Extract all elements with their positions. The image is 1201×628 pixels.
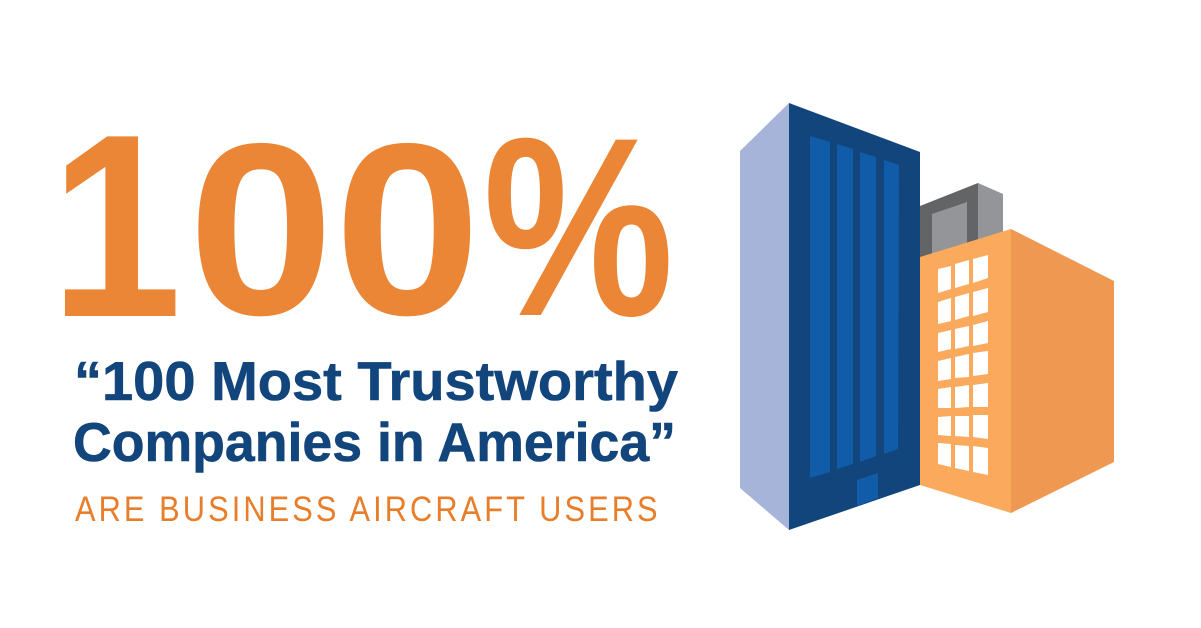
orange building	[920, 229, 1114, 513]
big statistic: 100%	[50, 81, 674, 372]
illustration: office buildings	[740, 103, 1114, 530]
heading line 1: “100 Most Trustworthy	[74, 350, 678, 412]
grey rooftop structure	[920, 183, 1003, 262]
windows	[938, 255, 988, 475]
digit 0: 0	[188, 92, 334, 366]
subheading: ARE BUSINESS AIRCRAFT USERS	[75, 489, 658, 528]
digit 0: 0	[334, 92, 481, 366]
percent sign: %	[483, 85, 674, 370]
digit 1: 1	[50, 81, 182, 372]
heading line 2: Companies in America”	[73, 411, 676, 473]
blue tower	[740, 103, 920, 530]
